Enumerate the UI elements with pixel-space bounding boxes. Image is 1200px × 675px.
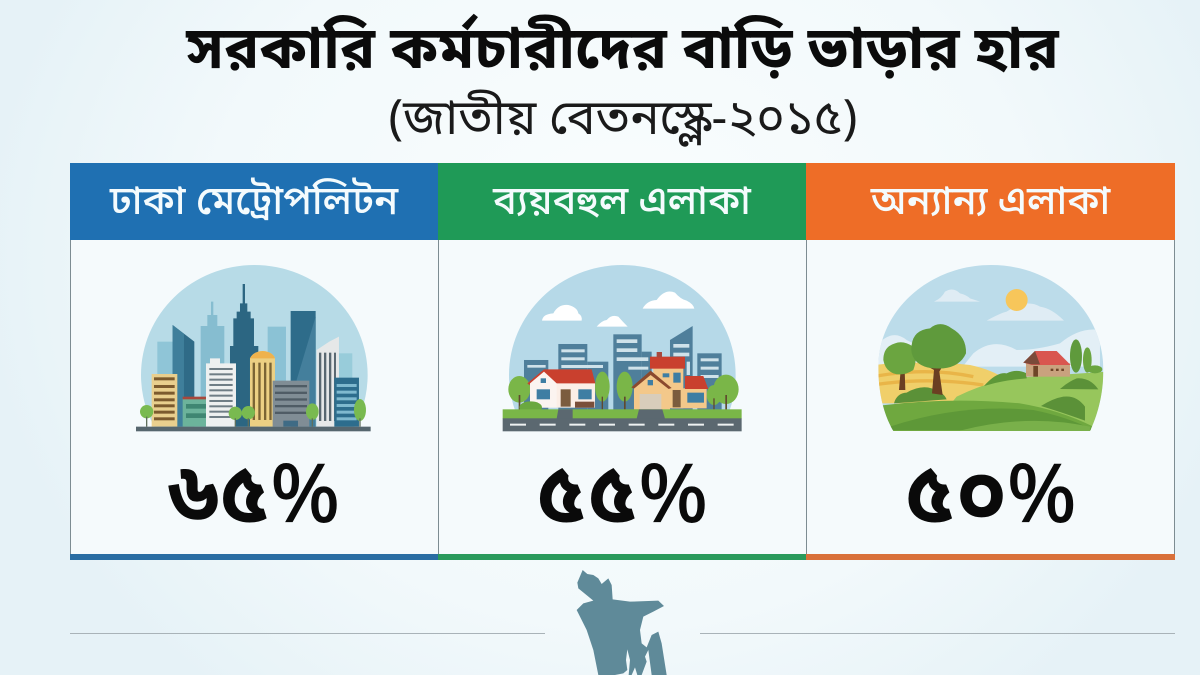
- icon: suburb with houses: [502, 265, 742, 432]
- panel: high-cost area: [438, 163, 806, 560]
- heading: high-cost area: ব্যয়বহুল এলাকা: [493, 179, 751, 231]
- panel header: dhaka metropolitan: [70, 163, 438, 240]
- panel header: other areas: [806, 163, 1175, 240]
- value: 65 percent: ৬৫%: [168, 446, 340, 557]
- icon: rural landscape: [878, 265, 1104, 431]
- value: 50 percent: ৫০%: [904, 446, 1077, 557]
- panel bottom bar: blue: [70, 554, 438, 560]
- heading: other areas: অন্যান্য এলাকা: [871, 179, 1110, 231]
- subtitle: (জাতীয় বেতনস্কেল-২০১৫): [389, 89, 857, 154]
- panel bottom bar: orange: [806, 554, 1175, 560]
- value: 55 percent: ৫৫%: [536, 446, 708, 557]
- heading: dhaka metropolitan: ঢাকা মেট্রোপলিটন: [110, 179, 398, 231]
- panel header: high-cost area: [438, 163, 806, 240]
- panel: other areas: [806, 163, 1175, 560]
- panel bottom bar: green: [438, 554, 806, 560]
- title: সরকারি কর্মচারীদের বাড়ি ভাড়ার হার: [186, 14, 1059, 92]
- icon: city skyline: [136, 265, 371, 432]
- panel: dhaka metropolitan: [70, 163, 438, 560]
